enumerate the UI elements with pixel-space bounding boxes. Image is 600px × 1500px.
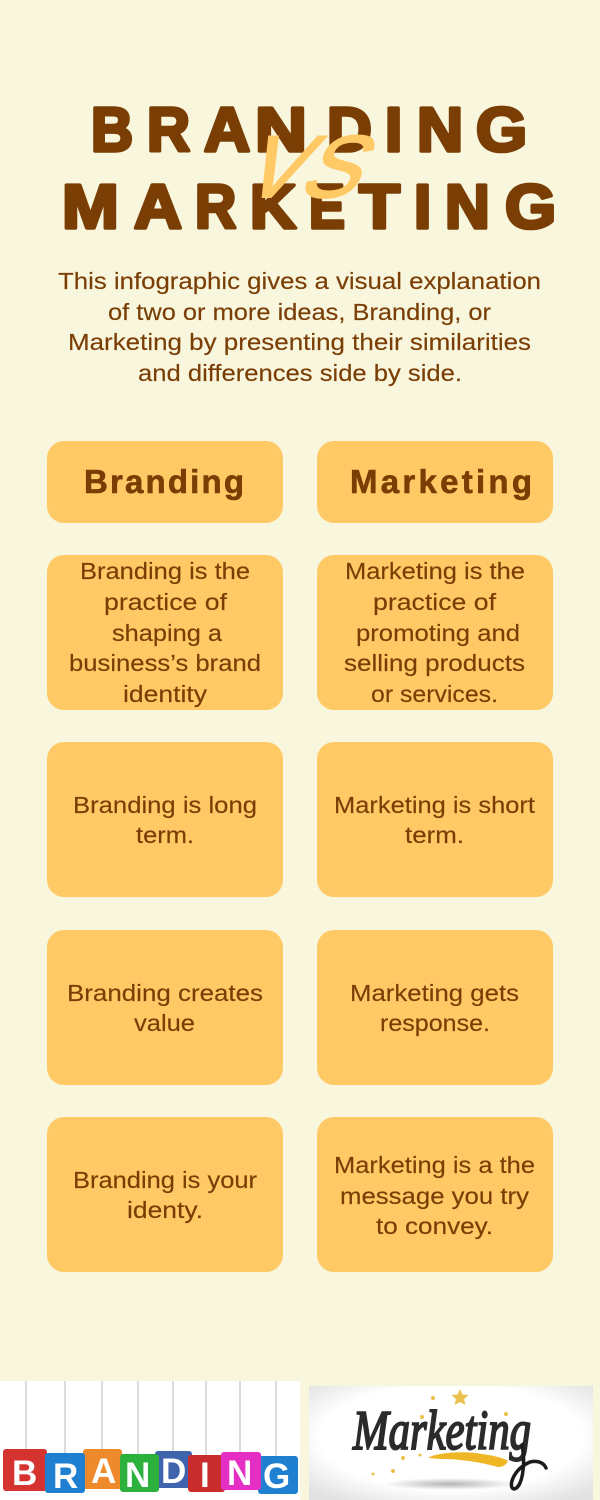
card: branding definition: shaping a	[112, 620, 222, 646]
card: branding creates value: Branding creates	[67, 980, 263, 1006]
header: Branding: Branding	[84, 463, 244, 500]
card: branding creates value: value	[134, 1010, 195, 1036]
card: marketing definition: practice of	[373, 589, 497, 615]
card: branding definition: practice of	[104, 589, 228, 615]
illustration: hanging Branding letter tags: A	[91, 1452, 116, 1491]
card: marketing gets response: Marketing gets	[350, 980, 519, 1006]
script word: Marketing	[352, 1400, 531, 1462]
title line: Marketing: G	[505, 172, 556, 242]
card: marketing message	[317, 1117, 553, 1272]
title line: Branding: R	[147, 95, 190, 164]
header: Marketing: Marketing	[350, 463, 532, 500]
title line: Marketing: T	[359, 172, 400, 241]
intro text: and differences side by side.	[138, 360, 462, 386]
illustration: hanging Branding letter tags: N	[227, 1454, 252, 1493]
title line: Branding	[91, 95, 527, 165]
intro text: of two or more ideas, Branding, or	[108, 299, 491, 325]
title line: Branding: B	[91, 95, 133, 164]
card: branding long term: Branding is long	[73, 792, 257, 818]
card: branding definition	[47, 555, 283, 710]
card: branding definition: identity	[123, 681, 208, 707]
title line: Marketing: A	[134, 172, 182, 242]
card: marketing message: to convey.	[376, 1213, 493, 1239]
illustration: hanging Branding letter tags: I	[200, 1456, 210, 1495]
shadow	[382, 1478, 518, 1490]
title line: Marketing: E	[309, 173, 345, 242]
card: marketing short term: term.	[405, 822, 464, 848]
card: branding creates value	[47, 930, 283, 1085]
title line: Branding: N	[417, 96, 463, 165]
card: marketing definition: promoting and	[356, 620, 520, 646]
gold brush stroke	[428, 1452, 508, 1467]
card: marketing gets response: response.	[380, 1010, 490, 1036]
card: branding long term	[47, 742, 283, 897]
card: marketing definition: Marketing is the	[345, 558, 525, 584]
vs script accent: VS	[228, 117, 395, 216]
illustration: hanging Branding letter tags	[0, 1381, 300, 1500]
intro text	[58, 268, 541, 386]
illustration: hanging Branding letter tags: R	[53, 1457, 78, 1496]
title line: Marketing: M	[62, 172, 119, 241]
g tail flourish	[511, 1445, 546, 1489]
title	[62, 95, 556, 242]
illustration: hanging Branding letter tags: G	[263, 1457, 290, 1496]
card: branding identity	[47, 1117, 283, 1272]
illustration: hanging Branding letter tags: B	[12, 1454, 37, 1493]
title line: Marketing: N	[445, 173, 490, 242]
intro text: This infographic gives a visual explanation	[58, 268, 541, 294]
card: marketing definition: selling products	[344, 650, 525, 676]
illustration: Marketing script logo	[309, 1386, 593, 1500]
illustration: hanging Branding letter tags: N	[125, 1456, 150, 1495]
card: marketing definition	[317, 555, 553, 710]
card: branding identity: Branding is your	[73, 1167, 257, 1193]
card: marketing message: Marketing is a the	[334, 1152, 535, 1178]
intro text: Marketing by presenting their similarities	[68, 329, 531, 355]
card: marketing short term	[317, 742, 553, 897]
card: branding definition: business’s brand	[69, 650, 261, 676]
title line: Marketing: I	[414, 173, 431, 242]
title line: Marketing	[62, 172, 556, 242]
card: marketing short term: Marketing is short	[334, 792, 536, 818]
stars	[372, 1389, 508, 1476]
card: branding long term: term.	[136, 822, 194, 848]
title line: Marketing: R	[195, 172, 236, 242]
title line: Branding: G	[476, 95, 527, 165]
header: Marketing	[317, 441, 553, 523]
card: marketing message: message you try	[340, 1183, 530, 1209]
title line: Branding: N	[255, 96, 307, 165]
title line: Branding: A	[204, 96, 250, 165]
illustration: hanging Branding letter tags: D	[161, 1452, 186, 1491]
title line: Marketing: K	[250, 173, 296, 242]
card: branding definition: Branding is the	[80, 558, 250, 584]
header: Branding	[47, 441, 283, 523]
card: branding identity: identy.	[127, 1197, 203, 1223]
title line: Branding: D	[327, 96, 372, 165]
card: marketing gets response	[317, 930, 553, 1085]
title line: Branding: I	[385, 96, 402, 165]
card: marketing definition: or services.	[371, 681, 498, 707]
